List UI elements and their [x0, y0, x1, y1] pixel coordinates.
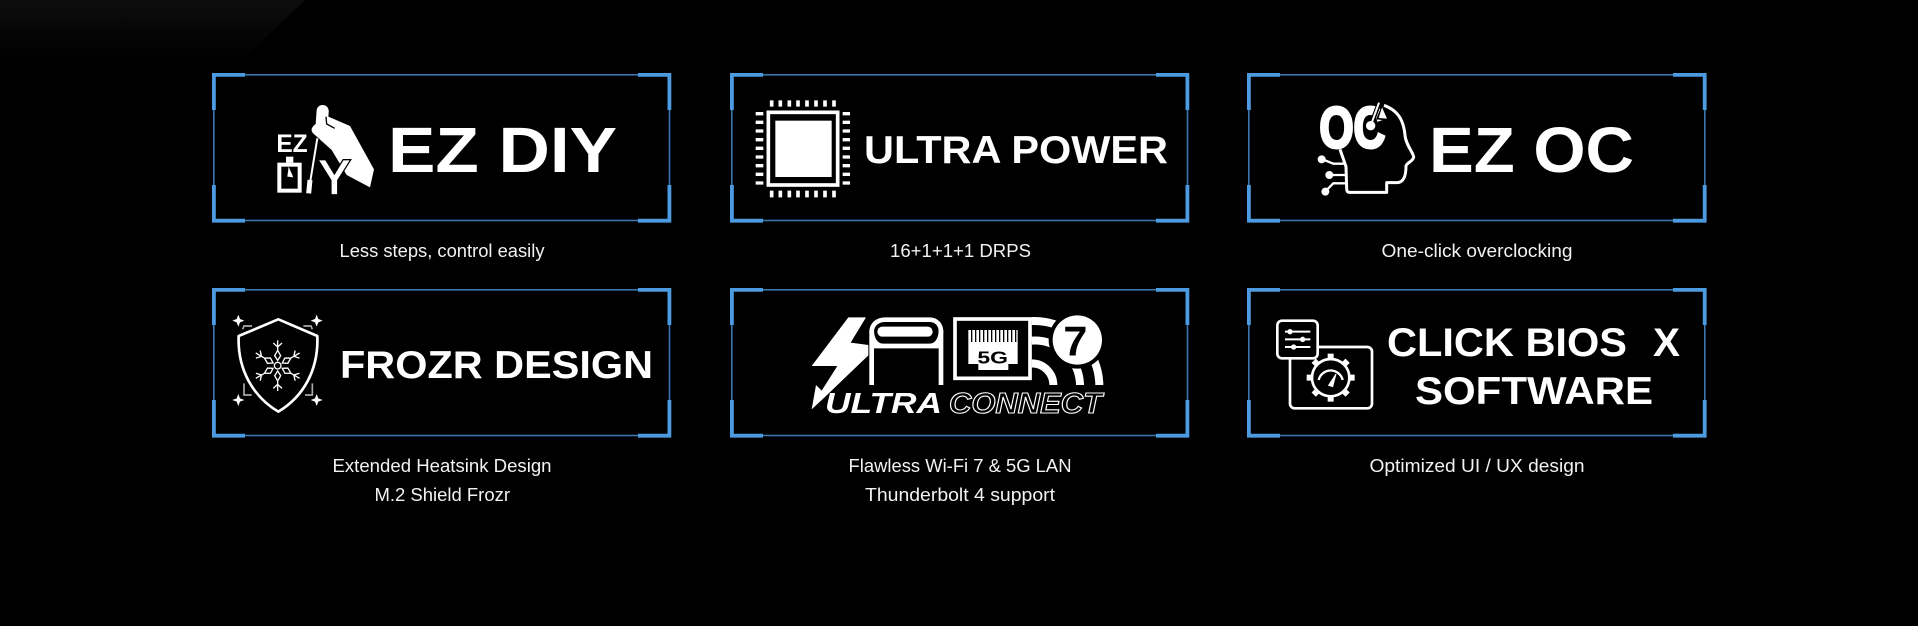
ethernet port [955, 319, 1030, 378]
panel: CLICK BIOS X SOFTWARE [1249, 290, 1705, 476]
icon: hand with screwdriver: EZ [276, 130, 308, 158]
icon: head with gauge [1318, 97, 1414, 196]
usb-c port [872, 320, 941, 385]
caption: 16+1+1+1 DRPS [890, 241, 1031, 261]
caption: M.2 Shield Frozr [374, 485, 510, 505]
ethernet port: 5G [977, 347, 1008, 367]
card frame [1249, 75, 1705, 221]
card frame [214, 75, 670, 221]
caption: Less steps, control easily [340, 241, 544, 261]
caption: Thunderbolt 4 support [865, 485, 1055, 505]
icon: hand with screwdriver [276, 105, 374, 204]
icon: connectivity logo [812, 311, 1106, 409]
caption: Extended Heatsink Design [332, 456, 552, 476]
panel: ULTRA CONNECT [732, 290, 1188, 505]
panel: ULTRA POWER [732, 75, 1188, 261]
caption: Flawless Wi-Fi 7 & 5G LAN [848, 456, 1072, 476]
wifi arcs and 7 badge: 7 [1063, 317, 1087, 364]
panel: EZ OC [1249, 75, 1705, 261]
logo text: CONNECT: CONNECT [949, 388, 1104, 420]
logo text: ULTRA POWER [864, 129, 1168, 172]
caption [332, 456, 552, 505]
logo text: CLICK BIOS X: X [1653, 321, 1680, 365]
logo text: EZ DIY [388, 114, 617, 186]
card frame [732, 290, 1188, 436]
caption: One-click overclocking [1382, 241, 1572, 261]
logo text: ULTRA: ULTRA [825, 388, 942, 420]
logo text: CLICK BIOS X: CLICK BIOS [1387, 321, 1627, 365]
caption [848, 456, 1072, 505]
icon: hand with screwdriver: Y [319, 151, 349, 204]
card frame [1249, 290, 1705, 436]
logo text: EZ OC [1429, 114, 1634, 186]
card frame [214, 290, 670, 436]
icon: shield with snowflake [232, 315, 323, 412]
logo text: SOFTWARE: SOFTWARE [1415, 370, 1653, 413]
caption: Optimized UI / UX design [1370, 456, 1584, 476]
panel: FROZR DESIGN [214, 290, 670, 505]
icon: settings window with gauge [1277, 321, 1372, 408]
wifi arcs and 7 badge [1032, 311, 1106, 385]
logo text: FROZR DESIGN [340, 344, 653, 387]
card frame [732, 75, 1188, 221]
icon: processor chip [756, 100, 850, 197]
icon: hand with screwdriver: Y [319, 151, 349, 204]
icon: head with gauge: OC [1319, 97, 1385, 161]
panel: EZ DIY [214, 75, 670, 261]
lightning bolt [812, 317, 868, 409]
